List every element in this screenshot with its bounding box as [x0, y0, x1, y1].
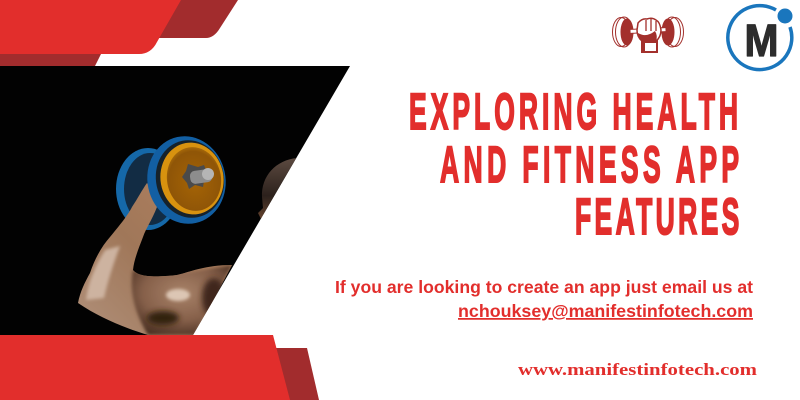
orange plate [160, 142, 224, 214]
front dumbbell plate [147, 136, 226, 224]
logo: Manifest M [728, 6, 792, 70]
head of athlete [258, 158, 296, 218]
contact text: nchouksey@manifestinfotech.com [458, 301, 753, 321]
bar [630, 28, 666, 33]
top dark red shape [100, 0, 238, 38]
wrist [641, 40, 658, 53]
rear dumbbell plate [116, 148, 170, 230]
fist [637, 18, 661, 41]
title: EXPLORING HEALTH [409, 83, 742, 140]
lower dark red strip [0, 50, 103, 66]
top red shape [0, 0, 181, 54]
dumbbell nut [182, 164, 206, 189]
website url: www.manifestinfotech.com [518, 360, 757, 379]
contact text [335, 277, 753, 321]
contact text: If you are looking to create an app just email us at [335, 277, 753, 297]
bicep shading [132, 265, 232, 335]
bottom dark red shape [276, 348, 319, 400]
title: AND FITNESS APP [440, 136, 744, 193]
title [409, 83, 744, 245]
photo: arm with dumbbell [0, 66, 350, 340]
bottom red shape [0, 335, 290, 400]
logo letter: M [744, 15, 778, 66]
title: FEATURES [575, 188, 743, 245]
right plates [662, 17, 684, 47]
logo dot [778, 8, 792, 24]
icon: fist with dumbbell [612, 17, 684, 53]
left plates [612, 17, 633, 47]
arm [78, 183, 232, 335]
forearm highlight [86, 246, 120, 300]
forearm and bicep [78, 183, 232, 335]
